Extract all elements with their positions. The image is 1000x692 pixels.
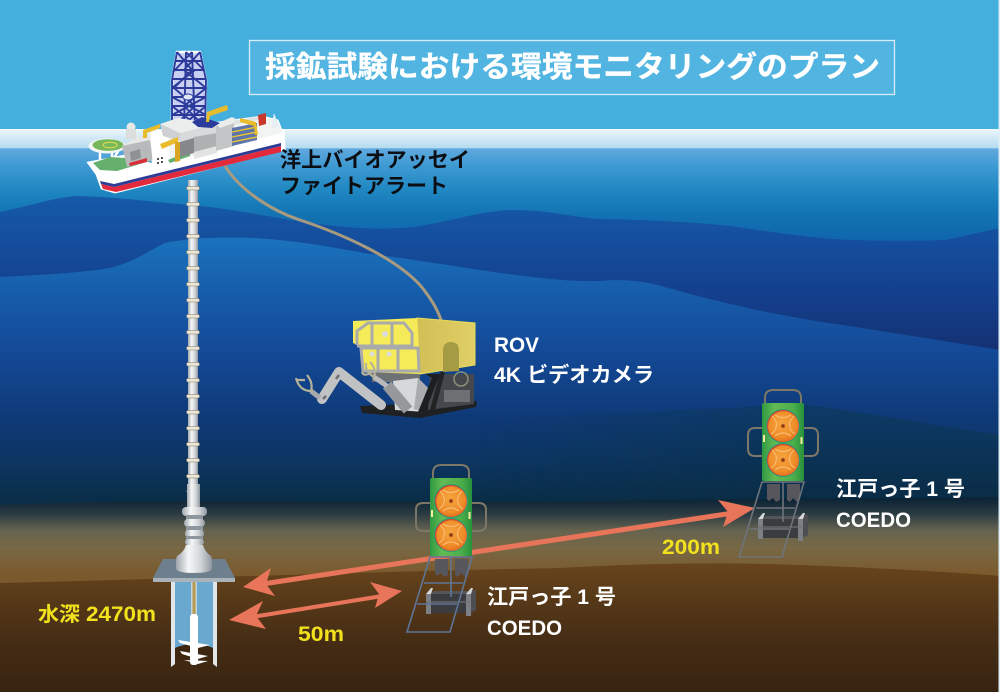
right border line [998,0,1000,692]
helideck [88,138,126,162]
label: ROV and camera [494,334,654,387]
label: far COEDO [836,478,965,532]
stern mast [271,113,279,128]
ROV right arm [362,362,408,410]
base plate [153,559,235,582]
background: sky [0,0,1000,130]
label: near COEDO: COEDO [487,617,562,640]
COEDO lander: far [739,390,818,557]
green foredeck [93,157,153,171]
background: ocean surface layer [0,129,1000,309]
label: ROV and camera: ROV [494,334,539,357]
striped equipment rack [232,123,257,146]
COEDO lander: near [407,465,486,632]
label: 50m: 50m [298,623,344,646]
label: far COEDO: 江戸っ子 1 号 [836,478,965,501]
background: back seafloor [0,497,1000,692]
label: 200m: 200m [662,536,720,559]
label: near COEDO [487,586,616,640]
label: surface bioassay [280,149,470,198]
derrick tower [172,52,206,127]
ROV lamps [370,331,392,356]
drillship [88,52,284,192]
label: ROV and camera: 4K ビデオカメラ [494,363,654,387]
label: water depth [38,603,156,626]
red stern crane [258,113,266,126]
borehole casing [171,580,217,667]
background: far sea ridge [0,196,1000,400]
ROV door arch [443,342,459,372]
label: far COEDO: COEDO [836,509,911,532]
mining head: wellhead stack [153,484,235,667]
arrow: 200m distance [243,500,755,596]
green midship deck [168,151,190,163]
label: near COEDO: 江戸っ子 1 号 [487,586,616,609]
forward superstructure [122,122,153,167]
ship hull [89,131,284,192]
label: water depth: 2470m [86,603,156,626]
label: surface bioassay: ファイトアラート [280,175,448,198]
cable from ship to ROV [225,166,441,320]
background: middle sea ridge [0,238,1000,520]
dark blue derrick base [192,117,220,128]
ROV yellow float front [353,318,420,374]
auger screw [178,614,210,665]
title: 採鉱試験における環境モニタリングのプラン [265,51,880,84]
ROV yellow float side [417,318,475,374]
label: water depth: 水深 [38,603,80,626]
rear deck structure [148,116,283,167]
ROV base frame [360,401,477,418]
bridge block [150,128,170,167]
ROV left arm [296,372,381,405]
yellow cranes [143,105,258,162]
central block [160,116,262,159]
background: front seafloor [0,563,1000,692]
arrow: 50m distance [229,582,402,629]
stack column [176,484,212,573]
ROV [296,318,477,418]
label: surface bioassay: 洋上バイオアッセイ [280,149,470,172]
drill riser pipe [184,180,202,492]
title [250,40,894,94]
background: deep sea ridge [590,404,998,484]
ROV front frame [357,323,419,371]
ROV machinery [372,372,474,412]
